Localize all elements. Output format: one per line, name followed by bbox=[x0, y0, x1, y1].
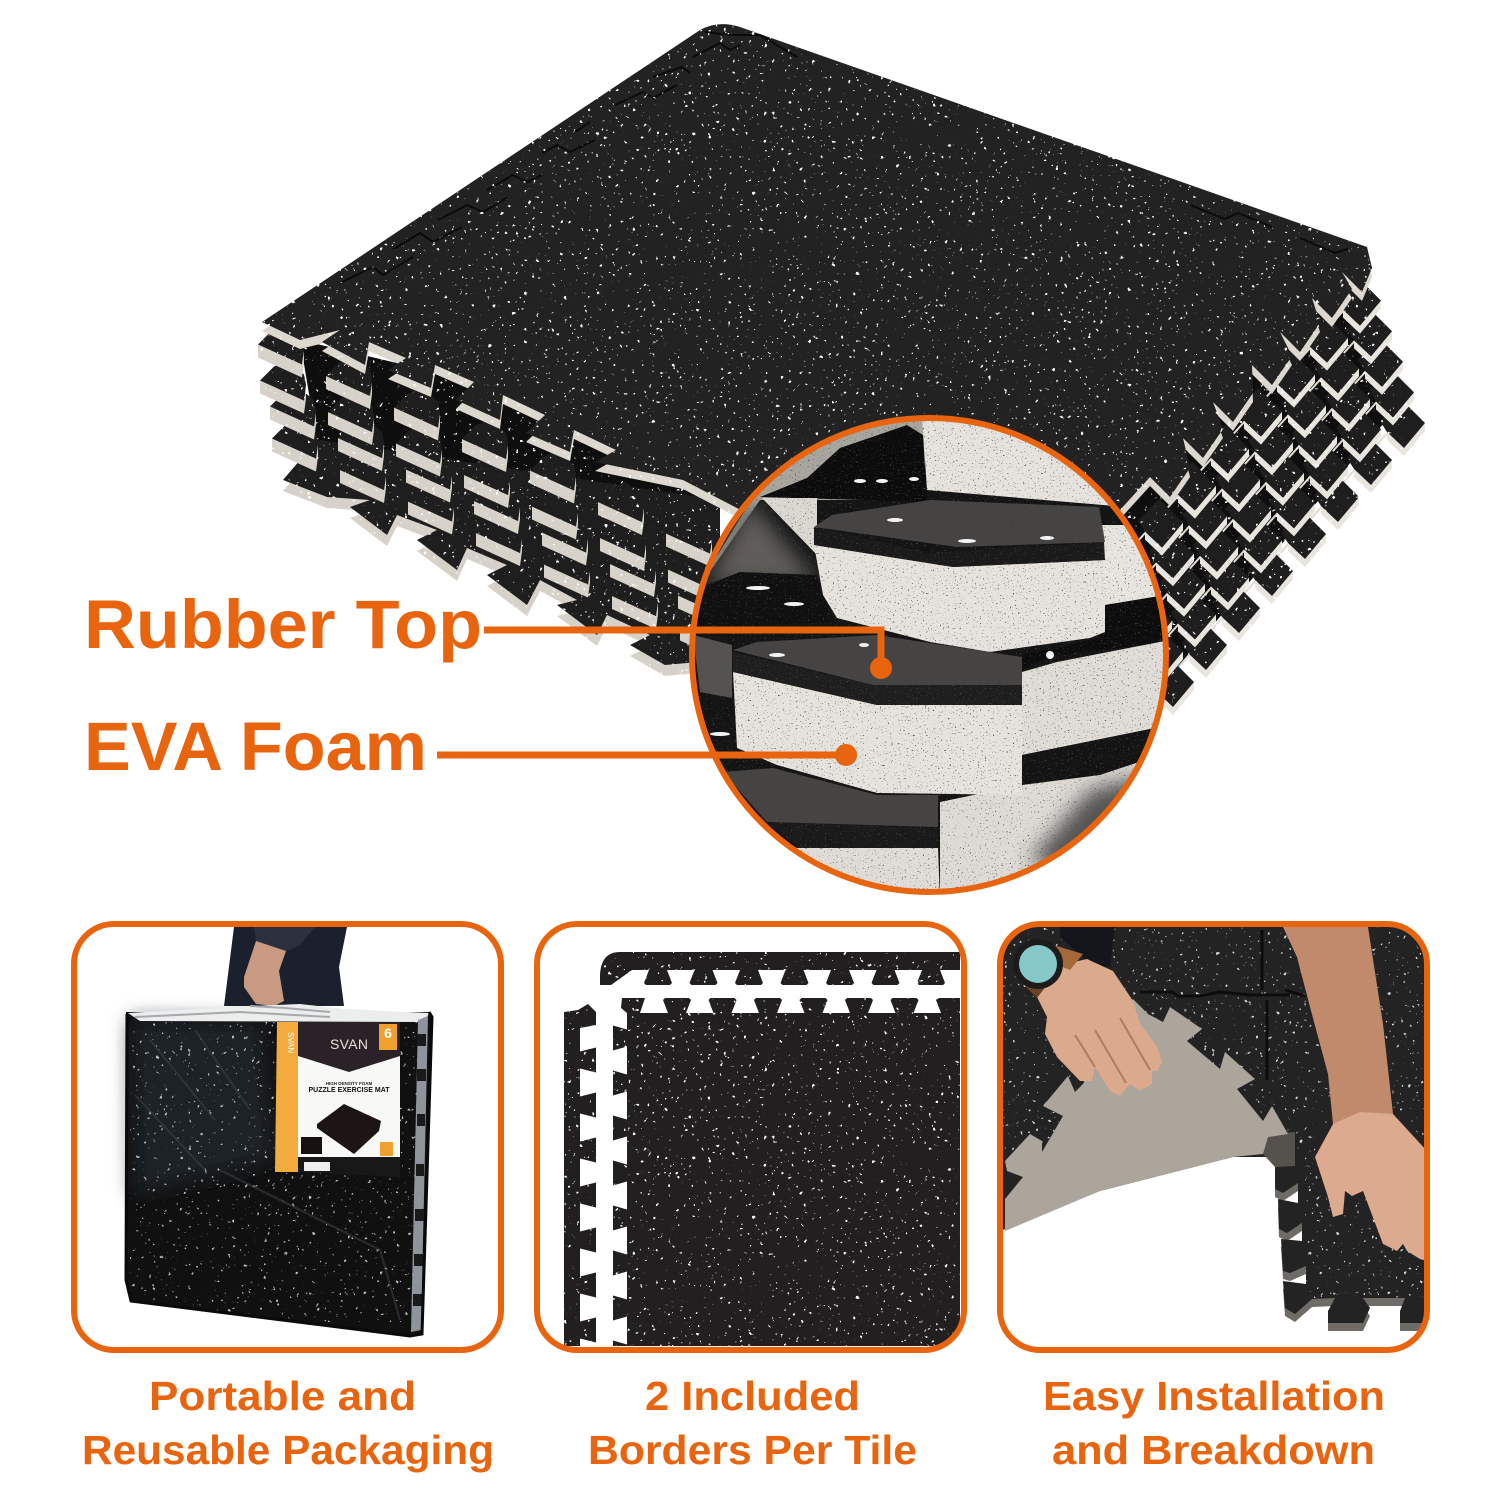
barcode bbox=[304, 1162, 330, 1171]
inset image bbox=[301, 1137, 322, 1154]
magnified cross-section circle bbox=[690, 415, 1175, 900]
corner tile speckles bbox=[1305, 1150, 1427, 1298]
bottom sheet surface bbox=[283, 440, 720, 665]
brand name: SVAN bbox=[330, 1036, 368, 1052]
leader line: EVA Foam bbox=[437, 752, 846, 758]
label yellow strip bbox=[275, 1022, 298, 1172]
circle outline bbox=[692, 418, 1166, 892]
top border teeth bbox=[635, 970, 960, 985]
left border strip bbox=[564, 1004, 596, 1346]
black upper band bbox=[760, 425, 927, 502]
right foam block bbox=[1022, 640, 1170, 755]
installation photo bbox=[1000, 924, 1427, 1350]
watch face bbox=[1019, 945, 1057, 983]
bag speckles bbox=[130, 1022, 420, 1322]
label chevron bbox=[298, 1022, 400, 1072]
upper foam block bbox=[922, 421, 1110, 506]
size tag bbox=[380, 1142, 393, 1156]
left stack base bbox=[300, 340, 720, 650]
floor mat behind fold bbox=[1000, 924, 1300, 1231]
right arm bbox=[1283, 927, 1393, 1124]
heading: PUZZLE EXERCISE MAT bbox=[308, 1087, 390, 1094]
right stack base bbox=[1100, 260, 1395, 670]
watch strap upper bbox=[1045, 944, 1083, 970]
label: Rubber Top: Rubber Top bbox=[84, 586, 482, 663]
right stack teeth bbox=[1094, 277, 1425, 715]
bag top wrinkles bbox=[135, 1006, 330, 1017]
person hand bbox=[244, 941, 286, 1006]
right dark strip bbox=[1022, 728, 1151, 755]
callout: EVA Foam bbox=[84, 708, 857, 785]
foam grit bbox=[690, 415, 1170, 895]
caption: included borders bbox=[588, 1373, 917, 1473]
caption: portable packaging: Reusable Packaging bbox=[82, 1427, 494, 1473]
badge number: 6 bbox=[384, 1025, 392, 1041]
bag plastic wrinkles bbox=[135, 1030, 400, 1320]
floor seams bbox=[1140, 930, 1305, 1080]
product image: stacked mat tiles bbox=[250, 20, 1430, 720]
heading small: HIGH DENSITY FOAM bbox=[326, 1081, 372, 1086]
caption: included borders: 2 Included bbox=[645, 1373, 860, 1419]
top tile foam edge bbox=[262, 33, 1372, 664]
small foam skirts near fold bbox=[1263, 1132, 1295, 1167]
person legs bbox=[224, 927, 347, 1006]
panel border bbox=[74, 924, 501, 1350]
borders photo bbox=[537, 924, 964, 1350]
main tile corner tooth bbox=[621, 998, 645, 1013]
panel border bbox=[1000, 924, 1427, 1350]
main tile top teeth bbox=[654, 998, 960, 1013]
rubber flecks bbox=[710, 477, 1054, 736]
side title: SVAN bbox=[286, 1032, 295, 1053]
leader dot: EVA Foam bbox=[835, 744, 857, 766]
caption: easy installation: Easy Installation bbox=[1043, 1373, 1385, 1419]
corner tile surface bbox=[1275, 924, 1427, 1323]
product label bbox=[275, 1022, 400, 1177]
white gap left bbox=[597, 1013, 613, 1346]
floor speckles bbox=[1000, 924, 1427, 1150]
left pale wedge bbox=[762, 498, 817, 555]
lower right shadow bbox=[1020, 763, 1136, 868]
left lower grey bbox=[693, 635, 732, 698]
bag right zebra bbox=[413, 1040, 426, 1300]
center tile foam bbox=[814, 545, 1105, 652]
callout: Rubber Top bbox=[84, 586, 892, 679]
panel: included borders bbox=[537, 924, 964, 1350]
caption: easy installation: and Breakdown bbox=[1052, 1427, 1375, 1473]
caption: easy installation bbox=[1043, 1373, 1385, 1473]
person sleeve bbox=[254, 927, 315, 952]
bag right sheen bbox=[411, 1016, 428, 1332]
center right dark bbox=[1105, 601, 1128, 605]
packaging photo bbox=[115, 927, 434, 1338]
caption: portable packaging: Portable and bbox=[149, 1373, 416, 1419]
main tile left teeth bbox=[613, 1015, 627, 1346]
panel: portable packaging bbox=[74, 924, 501, 1350]
leader dot: Rubber Top bbox=[870, 657, 892, 679]
main tile rubber top bbox=[733, 635, 1022, 685]
finger gaps bbox=[1075, 1018, 1150, 1083]
label footer bbox=[298, 1157, 400, 1177]
lower tile rubber band bbox=[767, 822, 938, 848]
left grey shadow bbox=[705, 500, 820, 585]
leader line: Rubber Top bbox=[484, 630, 881, 668]
dark sleeve bbox=[1060, 927, 1115, 967]
left hand bbox=[1037, 959, 1162, 1096]
panel border bbox=[537, 924, 964, 1350]
center right foam bbox=[1101, 525, 1156, 605]
top border strip bbox=[600, 952, 960, 985]
top tile surface bbox=[262, 24, 1372, 655]
corner tile foam skirt bbox=[1275, 1130, 1427, 1331]
main tile foam bbox=[733, 672, 1022, 795]
right hand bbox=[1315, 1112, 1427, 1261]
watch bezel bbox=[1013, 939, 1063, 989]
center tile rubber top bbox=[814, 500, 1105, 547]
caption: included borders: Borders Per Tile bbox=[588, 1427, 917, 1473]
folded foam underside bbox=[1005, 999, 1288, 1231]
caption: portable packaging bbox=[82, 1373, 494, 1473]
left dark tile bbox=[704, 572, 822, 601]
bag body bbox=[126, 1012, 432, 1336]
interlock seam upper right bbox=[1190, 205, 1348, 253]
label: EVA Foam: EVA Foam bbox=[84, 708, 427, 785]
bag plastic sheen bbox=[132, 1020, 275, 1195]
badge bbox=[379, 1024, 397, 1050]
left border teeth bbox=[580, 1037, 596, 1346]
white gap top bbox=[614, 986, 960, 998]
main tile bbox=[627, 1013, 960, 1346]
rubber speckles bbox=[250, 20, 1430, 720]
circle photo content bbox=[690, 415, 1175, 900]
bag clear top bbox=[128, 1004, 429, 1022]
interlock seam upper left bbox=[340, 32, 797, 283]
label white area bbox=[298, 1022, 400, 1158]
lower right foam bbox=[940, 762, 1137, 889]
bag outline bbox=[126, 1012, 432, 1336]
soft grey upper left bbox=[711, 421, 925, 570]
panel: easy installation bbox=[1000, 924, 1427, 1350]
center tile rubber band bbox=[814, 527, 1105, 567]
lower tile foam bbox=[796, 848, 940, 889]
bottom sheet foam edge bbox=[283, 451, 720, 676]
lower tile rubber top bbox=[723, 768, 938, 827]
speckles bbox=[560, 950, 960, 1346]
mini mat bbox=[317, 1104, 381, 1154]
main tile rubber band bbox=[733, 652, 1022, 705]
watch strap lower bbox=[1020, 975, 1047, 998]
left stack teeth bbox=[258, 324, 726, 660]
